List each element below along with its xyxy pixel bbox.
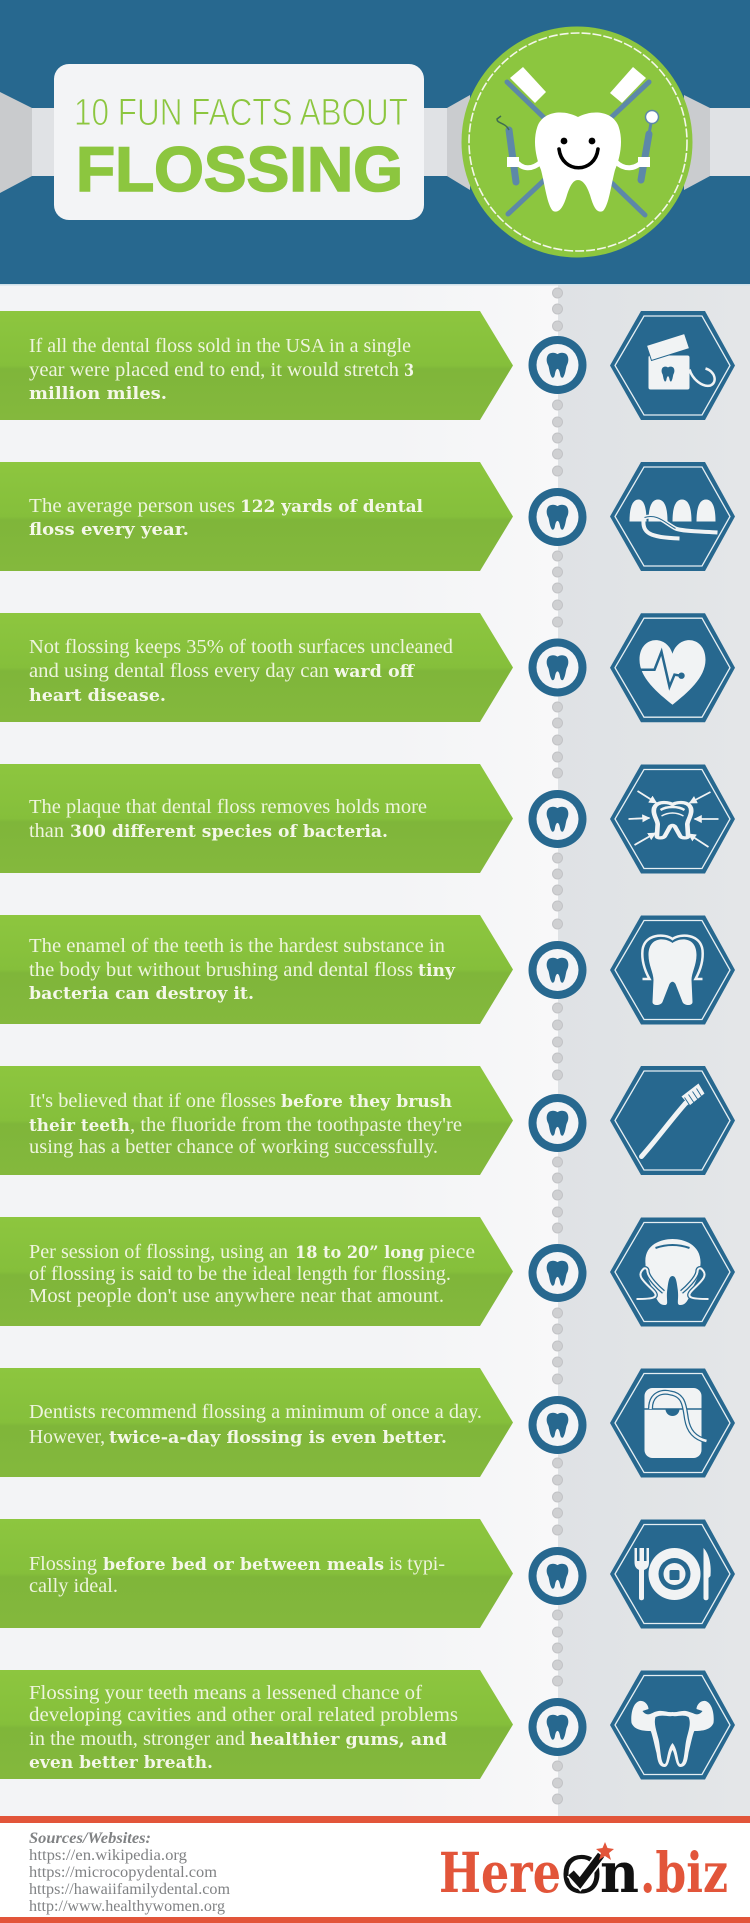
logo: HereOn.biz: n [600, 1840, 639, 1905]
fact 4 banner [0, 764, 513, 873]
fact 2 banner [0, 462, 513, 571]
fact 4 banner: 300 different species of bacteria. [70, 822, 388, 841]
fact 5 banner: the body but without brushing and dental floss [29, 959, 413, 981]
fact 4 banner: The plaque that dental floss removes holds more [29, 796, 427, 818]
sources list: https://en.wikipedia.org [29, 1847, 187, 1864]
fact 10 banner: developing cavities and other oral related problems [29, 1704, 458, 1726]
fact 4 banner: than [29, 820, 64, 842]
fact 9 banner: cally ideal. [29, 1575, 118, 1597]
fact 2 banner: The average person uses [29, 495, 235, 517]
logo: HereOn.biz: O [561, 1843, 602, 1905]
fact 3 banner: and using dental floss every day can [29, 660, 329, 682]
fact 6 tooth badge [528, 1094, 586, 1152]
fact 1 banner [0, 311, 513, 420]
header band [0, 0, 750, 286]
page background [0, 284, 558, 1816]
title line: 10 fun facts about: 10 FUN FACTS ABOUT [74, 92, 408, 134]
fact 8 banner: However, [29, 1426, 105, 1448]
fact 10 banner: Flossing your teeth means a lessened chance of [29, 1682, 422, 1704]
fact 7 tooth badge [528, 1244, 586, 1302]
fact 10 banner: healthier gums, and [250, 1730, 447, 1749]
fact 6 banner: , the fluoride from the toothpaste they're [130, 1114, 462, 1136]
fact 3 banner: ward off [333, 662, 416, 681]
fact 7 banner: 18 to 20” long [295, 1243, 424, 1262]
icon: tooth under bacterial attack [610, 764, 735, 874]
icon: teeth with floss [610, 462, 735, 571]
fact 7 banner: of flossing is said to be the ideal length for flossing. [29, 1263, 451, 1285]
logo: HereOn.biz: Here [439, 1840, 561, 1905]
fact 1 banner: 3 [404, 361, 414, 380]
fact 3 banner [0, 613, 513, 722]
fact 6 banner: before they brush [281, 1092, 452, 1111]
fact 5 banner: bacteria can destroy it. [29, 984, 254, 1003]
icon: floss box [610, 311, 735, 420]
fact 6 banner: using has a better chance of working successfully. [29, 1136, 438, 1158]
sources list: Sources/Websites: [29, 1830, 151, 1847]
fact 7 banner: Most people don't use anywhere near that amount. [29, 1285, 444, 1307]
fact 2 banner: floss every year. [29, 520, 189, 539]
fact 10 banner [0, 1670, 513, 1779]
fact 3 tooth badge [528, 638, 586, 696]
fact 5 tooth badge [528, 941, 586, 999]
title card [54, 64, 424, 220]
fact 10 banner: in the mouth, stronger and [29, 1728, 245, 1750]
fact 1 banner: million miles. [29, 384, 167, 403]
tooth mascot badge [462, 26, 692, 258]
sources list: https://microcopydental.com [29, 1864, 217, 1881]
icon: heart with pulse [610, 613, 735, 722]
fact 10 tooth badge [528, 1698, 586, 1756]
fact 1 banner: year were placed end to end, it would stretch [29, 359, 399, 381]
fact 9 banner: Flossing [29, 1553, 97, 1575]
fact 9 banner [0, 1519, 513, 1628]
fact 8 tooth badge [528, 1396, 586, 1454]
right grey column [558, 284, 750, 1816]
logo: HereOn.biz: .biz [640, 1840, 728, 1905]
fact 1 tooth badge [528, 336, 586, 394]
fact 8 banner: Dentists recommend flossing a minimum of once a day. [29, 1401, 482, 1423]
icon: floss container [610, 1368, 735, 1478]
fact 10 banner: even better breath. [29, 1753, 213, 1772]
fact 5 banner: tiny [418, 961, 455, 980]
dental tools [497, 110, 658, 182]
icon: muscular tooth [610, 1670, 735, 1780]
fact 2 tooth badge [528, 488, 586, 546]
dotted timeline [552, 288, 562, 1804]
toothbrushes [507, 67, 649, 215]
fact 6 banner: their teeth [29, 1116, 130, 1135]
logo: HereOn.biz [439, 1840, 728, 1905]
fact 5 banner [0, 915, 513, 1024]
fact 7 banner: piece [429, 1241, 475, 1263]
title line: flossing: FLOSSING [76, 135, 403, 205]
fact 8 banner [0, 1368, 513, 1477]
fact 3 banner: Not flossing keeps 35% of tooth surfaces uncleaned [29, 636, 453, 658]
fact 7 banner [0, 1217, 513, 1326]
fact 1 banner: If all the dental floss sold in the USA in a single [29, 335, 411, 357]
icon: toothbrush [610, 1066, 735, 1175]
sources list: http://www.healthywomen.org [29, 1898, 225, 1915]
sources list: https://hawaiifamilydental.com [29, 1881, 230, 1898]
fact 4 tooth badge [528, 790, 586, 848]
fact 6 banner: It's believed that if one flosses [29, 1090, 276, 1112]
icon: tooth with floss between roots [610, 1218, 735, 1326]
fact 2 banner: 122 yards of dental [240, 497, 423, 516]
footer [0, 1816, 750, 1923]
fact 9 banner: before bed or between meals [103, 1555, 384, 1574]
fact 6 banner [0, 1066, 513, 1175]
fact 7 banner: Per session of flossing, using an [29, 1241, 288, 1263]
fact 3 banner: heart disease. [29, 686, 166, 705]
icon: enamel tooth [610, 916, 735, 1024]
icon: plate with fork and knife [610, 1520, 735, 1628]
fact 9 tooth badge [528, 1547, 586, 1605]
fact 5 banner: The enamel of the teeth is the hardest substance in [29, 935, 445, 957]
fact 8 banner: twice-a-day flossing is even better. [109, 1428, 447, 1447]
fact 9 banner: is typi- [389, 1553, 445, 1575]
sources list [29, 1830, 230, 1915]
ribbon behind title [0, 92, 750, 193]
tooth character [507, 112, 650, 212]
